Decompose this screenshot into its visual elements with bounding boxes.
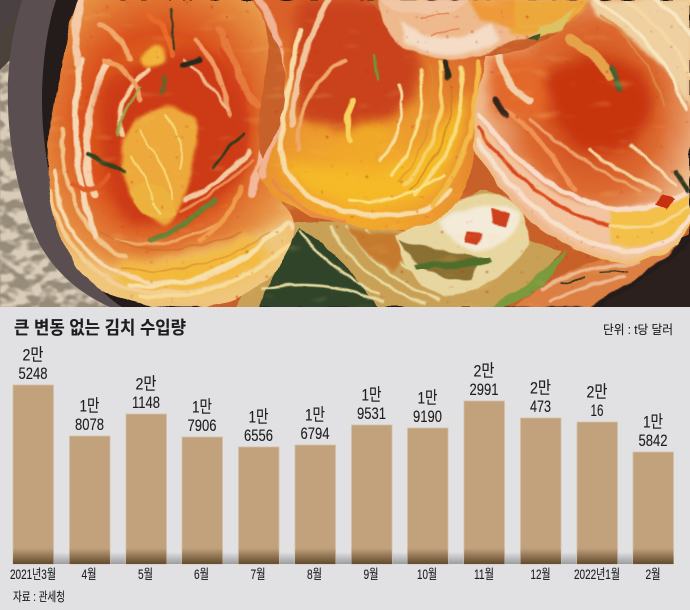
red core [99, 50, 250, 225]
source note: 자료 : 관세청 [13, 590, 65, 604]
bowl lower right shadow cover [600, 248, 690, 307]
bar: March 2021, 2만 5248: 2만 [22, 346, 44, 364]
bar: June, 1만 7906: 7906 [188, 416, 216, 435]
bar: February, 1만 5842: 1만 [643, 412, 663, 432]
bar: January 2022, 2만 16 [574, 382, 620, 582]
upper centre leaves [378, 0, 590, 59]
centre cabbage [250, 0, 495, 240]
bar: August, 1만 6794: 1만 [305, 406, 325, 424]
bar: August, 1만 6794 [295, 406, 336, 582]
bar: April, 1만 8078: 8078 [75, 415, 104, 434]
bar: June, 1만 7906: 6월 [194, 567, 209, 582]
bar: October, 1만 9190 [408, 388, 448, 582]
bar: August, 1만 6794: 6794 [300, 424, 330, 443]
outer stripes [50, 0, 292, 297]
bar: February, 1만 5842: 5842 [638, 431, 668, 450]
title: 큰 변동 없는 김치 수입량 [14, 318, 186, 338]
greens [87, 10, 243, 240]
bar: October, 1만 9190: 9190 [413, 407, 442, 426]
stone bowl rim [8, 0, 122, 307]
bar: May, 2만 1148 [126, 374, 166, 582]
bar: June, 1만 7906: 1만 [192, 398, 212, 416]
bar: July, 1만 6556: 1만 [248, 408, 269, 426]
bar: May, 2만 1148: 2만 [136, 374, 157, 394]
bar: December, 2만 473: 473 [530, 397, 551, 416]
bar: October, 1만 9190: 10월 [417, 567, 437, 582]
left cabbage [40, 0, 305, 310]
bar: December, 2만 473 [520, 378, 561, 582]
bar: January 2022, 2만 16: 16 [590, 401, 604, 420]
bar: September, 1만 9531: 1만 [362, 386, 382, 404]
baseline shadow band [13, 552, 674, 564]
bar: January 2022, 2만 16: 2만 [586, 382, 608, 402]
bar: November, 2만 2991: 11월 [474, 567, 494, 582]
bar: June, 1만 7906 [182, 398, 222, 582]
photo: kimchi in a stone bowl [0, 0, 690, 312]
bar: October, 1만 9190: 1만 [418, 388, 438, 408]
yellow heart leaf [122, 107, 197, 225]
jute mat [0, 0, 110, 307]
bar: July, 1만 6556: 7월 [250, 567, 266, 582]
bar: March 2021, 2만 5248: 2021년3월 [10, 567, 56, 582]
bowl lower right dark area [590, 240, 690, 312]
bar chart: monthly kimchi import unit price [10, 346, 674, 582]
bar: August, 1만 6794: 8월 [307, 567, 322, 582]
bar: September, 1만 9531: 9월 [364, 567, 378, 582]
bar: July, 1만 6556 [238, 408, 279, 582]
bar: April, 1만 8078: 1만 [80, 396, 100, 416]
bar: November, 2만 2991: 2만 [474, 362, 495, 380]
bar: March 2021, 2만 5248 [10, 346, 56, 582]
bar: May, 2만 1148: 5월 [138, 567, 153, 582]
bar: May, 2만 1148: 1148 [132, 393, 160, 412]
warm underlay closing gaps between cabbages [180, 0, 690, 307]
bar: January 2022, 2만 16: 2022년1월 [574, 567, 620, 582]
unit note: 단위 : t당 달러 [603, 323, 673, 337]
bar: March 2021, 2만 5248: 5248 [18, 364, 48, 383]
bar: November, 2만 2991: 2991 [470, 380, 498, 399]
chilli flecks [0, 0, 690, 307]
bar: February, 1만 5842: 2월 [646, 567, 660, 582]
bar: April, 1만 8078 [70, 396, 110, 582]
bottom centre cabbage with green leaves [235, 190, 680, 307]
bar: December, 2만 473: 12월 [530, 567, 550, 582]
kimchi [40, 0, 690, 312]
bar: February, 1만 5842 [633, 412, 674, 582]
bowl interior [42, 0, 690, 312]
bar: July, 1만 6556: 6556 [244, 426, 273, 445]
dark object top left [0, 0, 22, 32]
bar: September, 1만 9531: 9531 [357, 404, 386, 423]
bar: November, 2만 2991 [464, 362, 504, 582]
bar: September, 1만 9531 [352, 386, 392, 582]
bar: December, 2만 473: 2만 [530, 378, 551, 398]
leaf fibre highlights [0, 0, 690, 307]
bar: April, 1만 8078: 4월 [82, 567, 96, 582]
right cabbage [470, 0, 690, 270]
